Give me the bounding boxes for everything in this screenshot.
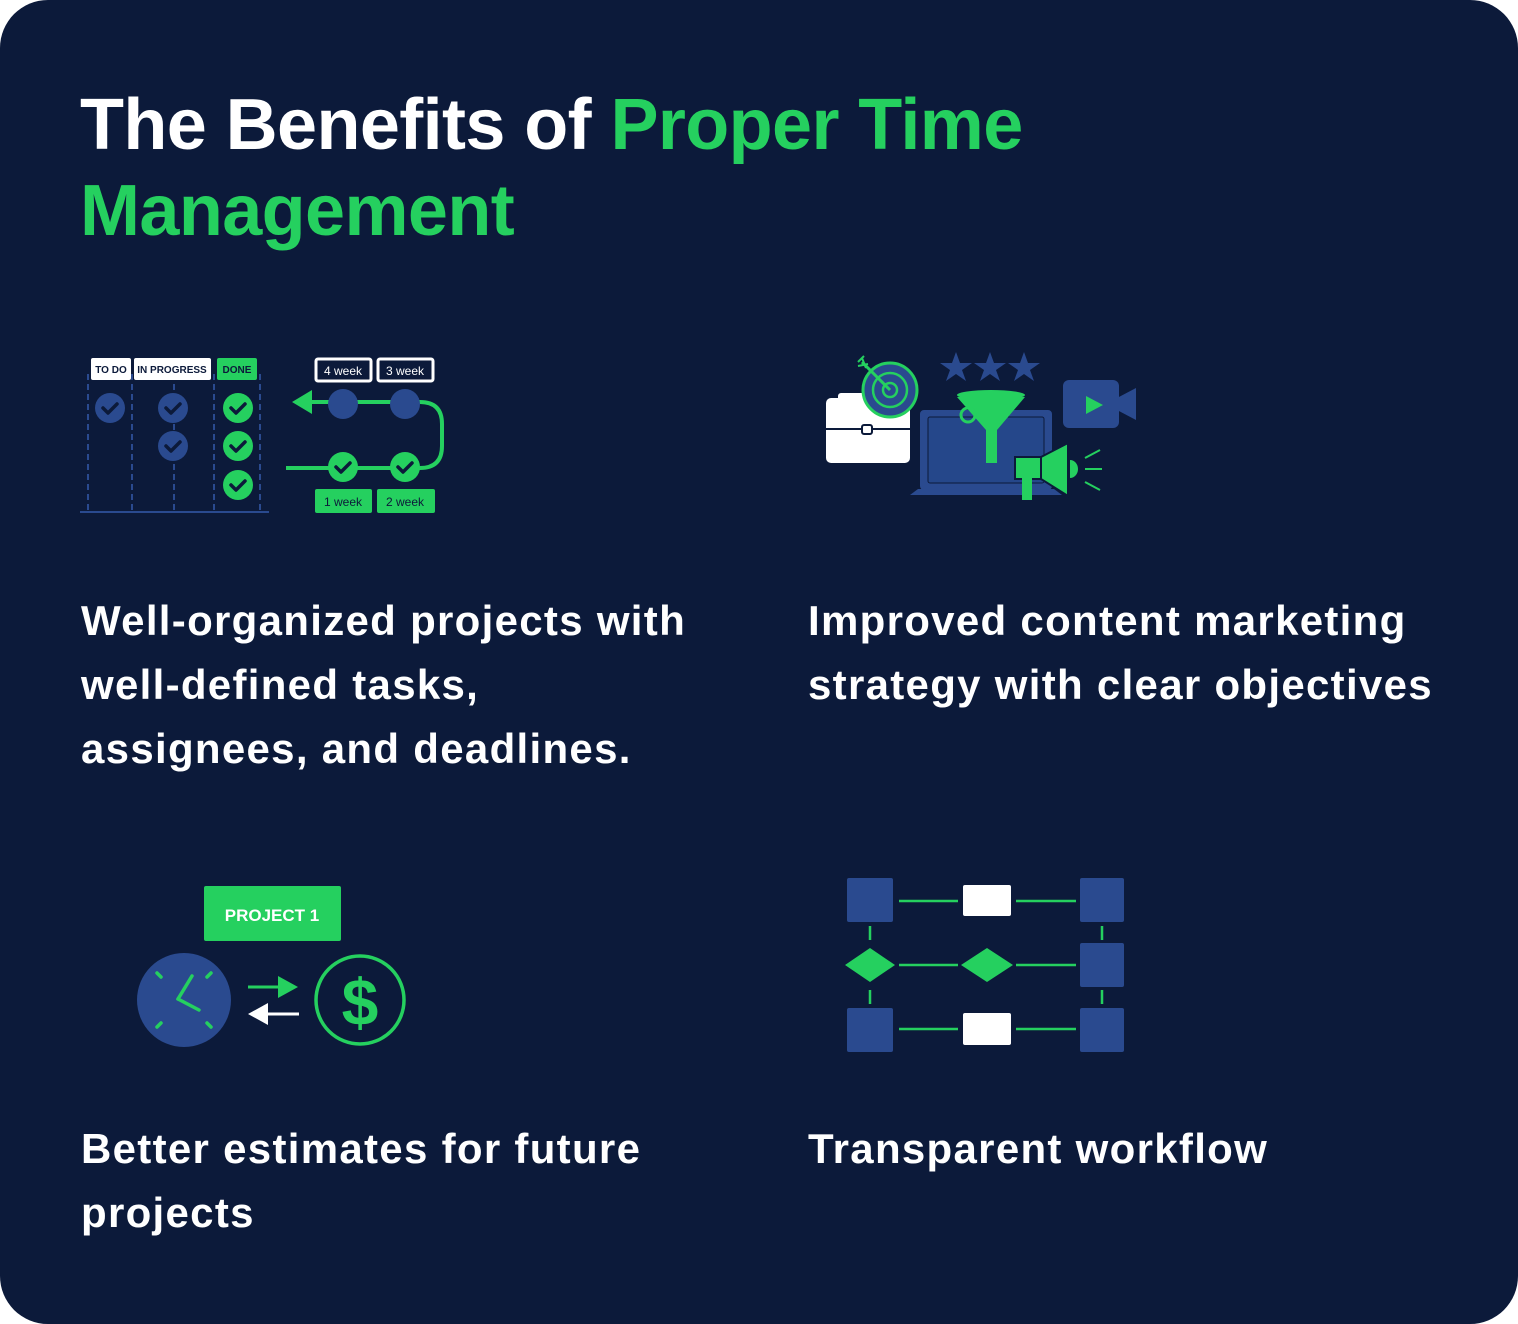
text: organized projects: assignees, and deadlines. — [81, 725, 632, 772]
text: workflow: Transparent workflow — [808, 1125, 1268, 1172]
text: estimates — [81, 1125, 641, 1236]
icon: project estimate: PROJECT 1 — [225, 906, 319, 925]
text: estimates: projects — [81, 1189, 255, 1236]
text: content marketing — [808, 597, 1433, 708]
text: content marketing: Improved content marketing — [808, 597, 1407, 644]
icon: project estimate: $ — [342, 965, 378, 1039]
text: organized projects — [80, 597, 686, 772]
title: The Benefits of Proper Time — [80, 85, 1023, 165]
icon: kanban board and timeline: 3 week — [386, 364, 425, 378]
text: estimates: Better estimates for future — [81, 1125, 641, 1172]
icon: kanban board and timeline: DONE — [223, 365, 252, 376]
icon: kanban board and timeline: TO DO — [95, 365, 127, 376]
icon: kanban board and timeline: IN PROGRESS — [137, 365, 207, 376]
icon: kanban board and timeline: 1 week — [324, 495, 363, 509]
text: content marketing: strategy with clear objectives — [808, 661, 1433, 708]
text: organized projects: well-defined tasks, — [81, 661, 479, 708]
icon: kanban board and timeline: 2 week — [386, 495, 425, 509]
title — [80, 85, 1023, 251]
icon: kanban board and timeline: 4 week — [324, 364, 363, 378]
title: Management — [80, 171, 514, 251]
text: organized projects: Well-organized projects with — [81, 597, 686, 644]
